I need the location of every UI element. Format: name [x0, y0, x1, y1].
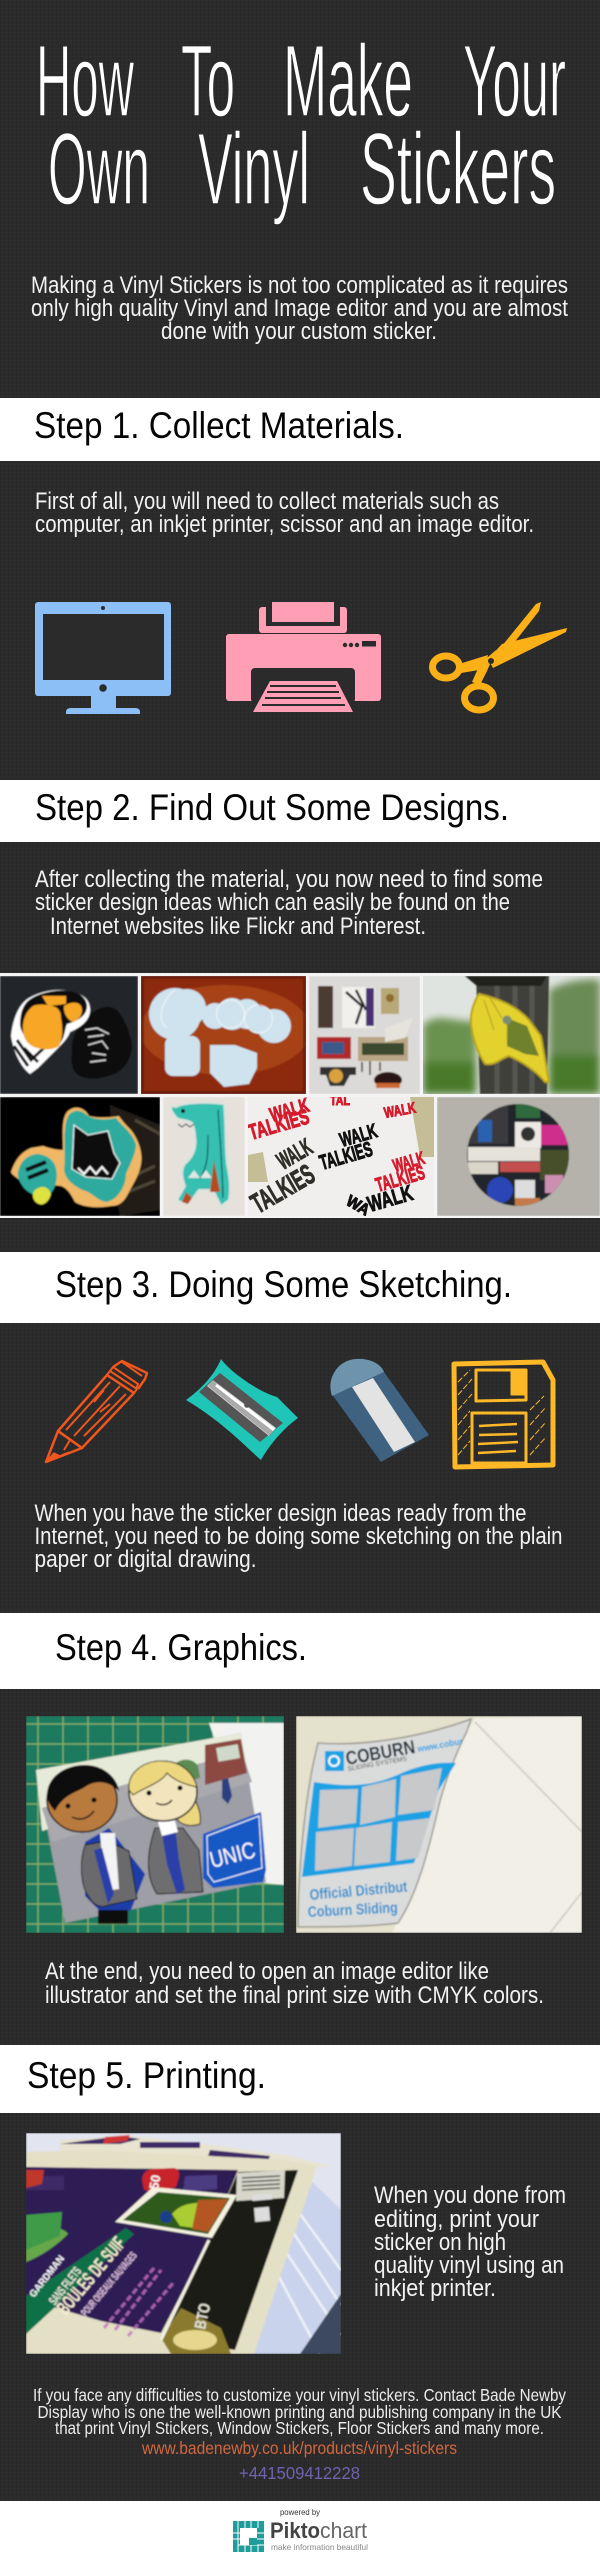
contact text	[33, 2385, 566, 2438]
heading: step 1	[0, 398, 600, 461]
school girl	[129, 1761, 203, 1894]
intro text: done with your custom sticker.	[161, 318, 437, 345]
icon: Piktochart logo	[233, 2521, 264, 2552]
photo: Coburn vinyl sticker peeled: Official Distribut	[309, 1879, 408, 1904]
photo: printed packaging vinyl sheets: GARDMAN	[28, 2254, 67, 2300]
icon: printer	[226, 600, 381, 712]
photo: assorted stickers on white	[309, 976, 420, 1094]
step 1 text	[35, 488, 534, 538]
title: Make	[283, 24, 413, 138]
heading: step 4	[0, 1613, 600, 1689]
heading: step 4: Step 4. Graphics.	[55, 1627, 307, 1668]
photo: pale blue stickers on red table	[140, 976, 310, 1094]
icon: computer monitor	[35, 602, 171, 714]
panel: step 1	[0, 461, 600, 780]
photo: teal monster sticker	[0, 1097, 160, 1216]
title: Own	[48, 112, 150, 226]
phone number: +441509412228	[239, 2463, 360, 2483]
photo: walki talkies stickers: WA	[343, 1193, 373, 1220]
photo: Coburn vinyl sticker peeled	[296, 1716, 582, 1933]
school boy	[47, 1765, 145, 1924]
step 4 text	[45, 1958, 544, 2009]
icon: sketched floppy disk	[454, 1362, 553, 1467]
heading: step 1: Step 1. Collect Materials.	[34, 405, 404, 446]
wordmark: Pikto	[270, 2518, 320, 2543]
step 5 text: editing, print your	[374, 2206, 539, 2233]
photo: walki talkies stickers: WALK	[337, 1120, 380, 1152]
icon: scissors	[432, 602, 567, 710]
icon: eraser	[330, 1359, 429, 1462]
step 2 text: sticker design ideas which can easily be found on the	[35, 889, 510, 916]
panel: step 2	[0, 842, 600, 1252]
panel: step 3	[0, 1323, 600, 1613]
blue sign: UNIC	[207, 1836, 258, 1873]
photo: walki talkies stickers: WALK	[383, 1100, 417, 1122]
photo: teal dinosaur sticker	[163, 1097, 245, 1216]
icon: sketched pencil	[46, 1361, 147, 1462]
blue sign	[203, 1812, 266, 1888]
photo: walki talkies stickers: TALKIES	[246, 1158, 320, 1219]
step 5 text: sticker on high	[374, 2229, 506, 2256]
wordmark: make information beautiful	[271, 2542, 368, 2552]
photo: walki talkies stickers: TALKIES	[245, 1104, 312, 1145]
photo: walki talkies stickers: WALK	[267, 1095, 312, 1127]
website link: www.badenewby.co.uk/products/vinyl-stickers	[141, 2438, 457, 2458]
title: Vinyl	[198, 112, 310, 226]
step 5 text	[374, 2182, 566, 2302]
photo: printed packaging vinyl sheets: 50	[146, 2174, 163, 2191]
photo: Coburn vinyl sticker peeled: Coburn Sliding	[307, 1899, 398, 1921]
photo: printed packaging vinyl sheets: SANS FILETS	[46, 2264, 85, 2308]
photo: printed packaging vinyl sheets: BTO	[192, 2302, 214, 2331]
photo: round sticker collage	[437, 1097, 600, 1216]
title: To	[181, 24, 235, 138]
photo: walki talkies stickers: TALKIES	[373, 1162, 427, 1197]
photo: walki talkies stickers	[245, 1092, 434, 1220]
footer: Piktochart branding	[0, 2501, 600, 2561]
intro text	[31, 272, 568, 345]
photo: school uniform sticker on cutting mat	[26, 1716, 284, 1933]
heading: step 3	[0, 1252, 600, 1323]
photo: Coburn vinyl sticker peeled: www.cobur	[416, 1736, 464, 1754]
photo: walki talkies stickers: WALK	[364, 1180, 416, 1217]
step 5 text: quality vinyl using an	[374, 2252, 564, 2279]
photo: walki talkies stickers: TAL	[330, 1092, 350, 1108]
photo: printed packaging vinyl sheets: BOULES DE SUIF	[53, 2233, 130, 2319]
panel: step 4	[0, 1689, 600, 2045]
step 4 text: At the end, you need to open an image editor like	[45, 1958, 489, 1985]
heading: step 2: Step 2. Find Out Some Designs.	[35, 787, 509, 828]
step 3 text: paper or digital drawing.	[34, 1546, 256, 1573]
photo: walki talkies stickers: WALK	[391, 1148, 427, 1176]
photo: orange stack sticker	[0, 976, 138, 1094]
photo: walki talkies stickers: WALK	[272, 1134, 317, 1175]
title: How	[36, 24, 134, 138]
photo: walki talkies stickers: TALKIES	[317, 1138, 375, 1175]
photo: printed packaging vinyl sheets: POUR OISEAUX SAUVAGES	[79, 2250, 140, 2319]
photo: Coburn vinyl sticker peeled: COBURN	[344, 1737, 417, 1770]
step 2 text: Internet websites like Flickr and Pinterest.	[50, 913, 426, 940]
heading: step 3: Step 3. Doing Some Sketching.	[55, 1264, 512, 1305]
step 5 text: When you done from	[374, 2182, 566, 2209]
step 2 text	[35, 866, 543, 940]
wordmark	[270, 2518, 368, 2552]
panel: step 5	[0, 2113, 600, 2501]
photo: Coburn vinyl sticker peeled: SLIDING SYSTEMS	[347, 1756, 408, 1773]
heading: step 2	[0, 780, 600, 842]
photo strip: sticker designs	[0, 973, 600, 1220]
step 5 text: inkjet printer.	[374, 2275, 496, 2302]
step 1 text: First of all, you will need to collect materials such as	[35, 488, 499, 515]
photo: yellow fish sticker on post	[423, 976, 600, 1094]
heading: step 5: Step 5. Printing.	[27, 2055, 266, 2096]
powered by: powered by	[280, 2507, 321, 2517]
panel: intro	[0, 0, 600, 398]
heading: step 5	[0, 2045, 600, 2113]
icon: pencil sharpener	[186, 1359, 298, 1460]
wordmark: chart	[320, 2518, 367, 2543]
step 3 text	[34, 1500, 562, 1573]
photo: printed packaging vinyl sheets	[26, 2133, 341, 2354]
title	[36, 24, 566, 226]
